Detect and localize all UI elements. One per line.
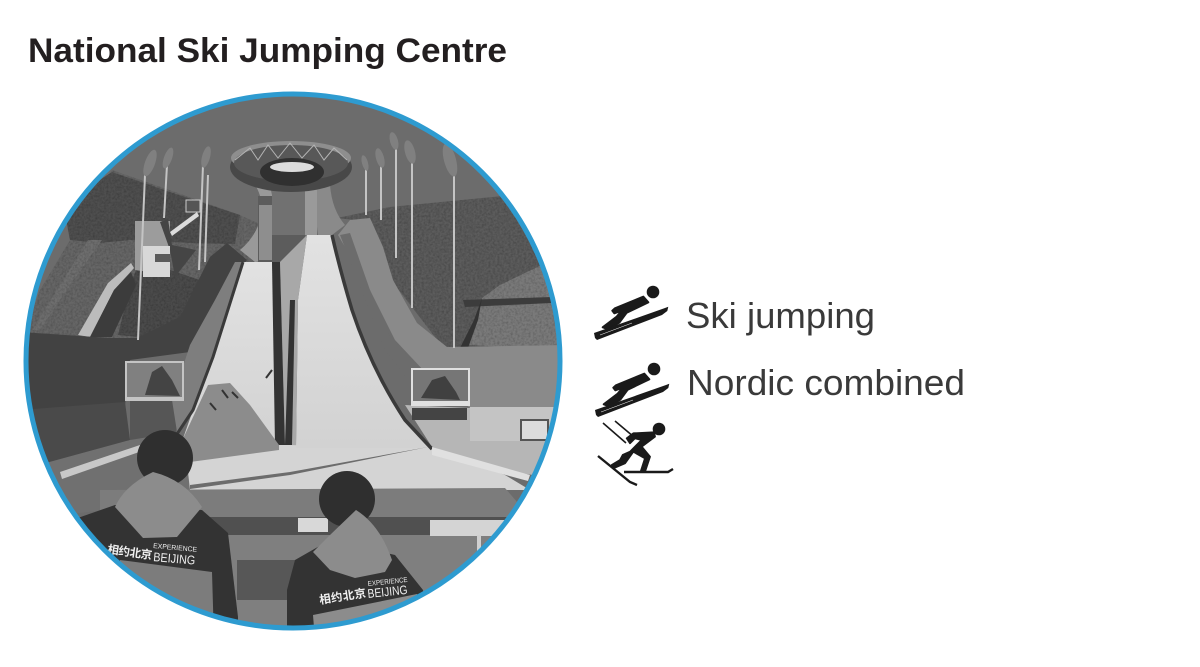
small skiers on slope [210, 370, 272, 410]
big screen right [411, 368, 548, 440]
person right: 相约北京 [318, 586, 367, 607]
label: ski jumping: Ski jumping [686, 295, 875, 336]
side barrier boards [60, 445, 142, 479]
tower stems [240, 188, 272, 262]
person left: BEIJING [153, 550, 196, 568]
barrier [228, 535, 491, 626]
foreground floor and snow [185, 445, 530, 490]
right outrun band [338, 218, 566, 408]
icon: ski jumping [594, 286, 668, 340]
label: nordic combined: Nordic combined [687, 362, 965, 403]
ground right of landing hill [405, 405, 545, 475]
right stands [340, 233, 370, 290]
person left [80, 430, 238, 620]
top ring building [230, 141, 352, 192]
tree line [463, 297, 552, 307]
photo: ski jumping venue in circular frame [20, 88, 566, 648]
person left: 相约北京 [107, 542, 153, 562]
left stands [172, 262, 243, 432]
centre divider [272, 262, 285, 445]
icon: nordic combined, ski jumping [595, 363, 669, 417]
person right [287, 471, 425, 640]
right landing slope [296, 235, 432, 448]
floodlight masts [138, 145, 454, 348]
left landing-area roof band [20, 243, 247, 410]
circular blue frame [26, 94, 560, 628]
title: National Ski Jumping Centre [28, 32, 507, 70]
shadow on left slope [180, 383, 279, 462]
person right: EXPERIENCE [367, 577, 408, 588]
left landing slope [184, 262, 275, 440]
icon: nordic combined, cross-country skiing [598, 421, 673, 485]
person right: BEIJING [367, 583, 408, 601]
rail track [78, 263, 134, 337]
person left: EXPERIENCE [153, 543, 198, 554]
big screen left [125, 361, 184, 401]
judges tower [135, 200, 200, 277]
lower-left ground [48, 438, 146, 474]
sky [34, 96, 532, 517]
shadow lines across snow [190, 447, 428, 489]
hillsides [20, 170, 566, 350]
